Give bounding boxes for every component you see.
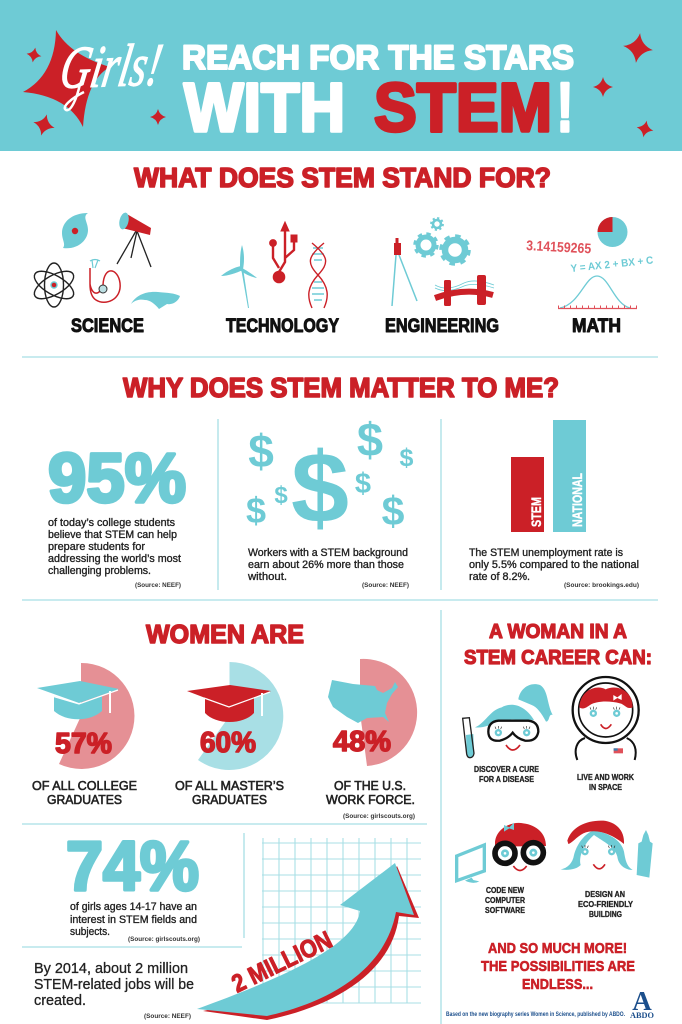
icon: stethoscope — [90, 260, 120, 302]
icon: coder — [457, 823, 546, 883]
icon: teal cap — [37, 681, 119, 719]
header banner — [0, 0, 682, 151]
grid — [262, 838, 421, 1003]
icon: pie — [598, 217, 628, 247]
pie — [59, 663, 134, 769]
text: The STEM unemployment rate is — [469, 547, 623, 559]
caption: GRADUATES — [47, 792, 122, 807]
icon: dollar signs: $ — [355, 468, 371, 500]
text: of today’s college students — [48, 517, 175, 529]
pie — [360, 659, 417, 766]
closing message: ENDLESS... — [522, 976, 593, 993]
icon: gears — [415, 218, 469, 264]
heading: women are: WOMEN ARE — [146, 619, 304, 649]
title exclamation: ! — [557, 69, 573, 146]
stat: 95% — [48, 439, 186, 517]
icon: compass — [392, 238, 417, 306]
title STEM: STEM — [374, 69, 552, 146]
heading: a woman in a stem career can: STEM CAREER CAN: — [464, 647, 652, 669]
stat: 60% — [200, 727, 256, 759]
panel: coder girl — [457, 823, 546, 915]
caption: CODE NEW — [486, 886, 524, 895]
icon: big red star — [23, 30, 110, 127]
caption: WORK FORCE. — [326, 792, 415, 807]
stat: 57% — [55, 728, 112, 760]
icon: dollar signs: $ — [357, 413, 383, 466]
panel: scientist girl — [463, 684, 553, 784]
text: challenging problems. — [48, 565, 151, 577]
footer note: Based on the new biography series Women in Science, published by ABDO. — [446, 1011, 625, 1018]
pi digits: 3.14159265 — [526, 237, 592, 256]
caption: DISCOVER A CURE — [474, 765, 540, 774]
caption: BUILDING — [589, 910, 622, 919]
caption: OF ALL MASTER’S — [175, 778, 284, 793]
panel: 74 percent — [66, 827, 200, 943]
Girls script: Girls! — [56, 32, 167, 102]
icon: dollar signs: $ — [248, 425, 274, 477]
stat: 74% — [66, 827, 199, 905]
closing message: THE POSSIBILITIES ARE — [481, 958, 635, 975]
heading: what does stem stand for: WHAT DOES STEM STAND FOR? — [134, 162, 551, 193]
icon: dna — [309, 243, 327, 308]
icon: hurricane — [62, 213, 88, 248]
text: without. — [247, 571, 287, 583]
text: earn about 26% more than those — [248, 559, 404, 571]
chart: growth arrow — [197, 838, 421, 1020]
closing message: AND SO MUCH MORE! — [488, 940, 627, 957]
text: believe that STEM can help — [48, 529, 177, 541]
icon: dollar signs: $ — [382, 488, 405, 534]
panel: science — [30, 212, 180, 337]
text: Workers with a STEM background — [248, 547, 408, 559]
panel: unemployment — [469, 420, 639, 589]
heading: a woman in a stem career can: A WOMAN IN A — [489, 621, 627, 643]
text: STEM-related jobs will be — [34, 976, 194, 993]
text: created. — [34, 992, 86, 1009]
icon: small stars — [25, 31, 655, 139]
caption: IN SPACE — [589, 783, 623, 792]
text: interest in STEM fields and — [70, 914, 197, 926]
source: (Source: NEEF) — [362, 582, 409, 589]
panel: 2 million jobs text — [34, 960, 194, 1020]
panel: 95 percent — [48, 439, 186, 589]
icon: bridge — [435, 275, 494, 306]
pie — [198, 662, 283, 770]
icon: red cap — [187, 685, 271, 722]
text: addressing the world’s most — [48, 553, 181, 565]
source: (Source: girlscouts.org) — [128, 936, 200, 943]
icon: architect — [561, 821, 653, 878]
stat: 48% — [333, 726, 391, 758]
label: MATH — [572, 316, 621, 337]
panel: math — [526, 217, 654, 337]
logo: ABDO: A — [632, 986, 652, 1016]
text: By 2014, about 2 million — [34, 960, 188, 977]
icon: scientist — [463, 684, 553, 758]
icon: astronaut — [573, 677, 639, 760]
heading: why does stem matter: WHY DOES STEM MATTER TO ME? — [123, 372, 559, 403]
caption: SOFTWARE — [485, 906, 526, 915]
text: rate of 8.2%. — [469, 571, 530, 583]
caption: OF THE U.S. — [334, 778, 406, 793]
bar chart — [511, 420, 586, 532]
icon: atom — [30, 263, 78, 307]
icon: wind turbine — [221, 245, 257, 308]
label: TECHNOLOGY — [226, 316, 339, 337]
icon: dollar signs — [246, 413, 414, 544]
icon: bell curve — [558, 276, 637, 308]
caption: FOR A DISEASE — [479, 775, 535, 784]
source: (Source: NEEF) — [144, 1013, 191, 1020]
source: (Source: NEEF) — [135, 582, 181, 589]
source: (Source: girlscouts.org) — [343, 813, 415, 820]
caption: GRADUATES — [192, 792, 267, 807]
Girls script — [56, 32, 167, 110]
caption: ECO-FRIENDLY — [578, 900, 634, 909]
caption: LIVE AND WORK — [577, 773, 634, 782]
icon: telescope — [117, 212, 151, 267]
icon: dollar signs: $ — [274, 482, 288, 509]
arrow shadow — [203, 866, 419, 1020]
caption: COMPUTER — [485, 896, 525, 905]
source: (Source: brookings.edu) — [564, 582, 639, 589]
panel: 48 percent — [326, 659, 417, 820]
icon: whale — [131, 292, 180, 309]
icon: usb — [270, 222, 297, 283]
arrow — [197, 863, 414, 1016]
label: SCIENCE — [71, 316, 144, 337]
panel: 57 percent — [32, 663, 137, 807]
title line 1: REACH FOR THE STARS — [182, 39, 574, 77]
panel: earnings — [246, 413, 414, 589]
icon: dollar signs: $ — [246, 490, 266, 531]
equation: Y = AX 2 + BX + C — [570, 254, 654, 275]
title line 2: WITH — [184, 69, 345, 146]
caption: DESIGN AN — [585, 890, 625, 899]
panel: architect girl — [561, 821, 653, 919]
panel: astronaut girl — [573, 677, 639, 792]
panel: 60 percent — [175, 662, 284, 807]
text: of girls ages 14-17 have an — [70, 901, 197, 913]
text: subjects. — [70, 926, 110, 938]
arrow label: 2 MILLION — [227, 926, 337, 998]
heading: a woman in a stem career can — [464, 621, 652, 669]
logo: ABDO: ABDO — [630, 1011, 654, 1020]
text: prepare students for — [48, 541, 145, 553]
label: ENGINEERING — [385, 316, 499, 337]
icon: usa map — [328, 680, 398, 723]
icon: dollar signs: $ — [291, 432, 349, 544]
icon: dollar signs: $ — [400, 444, 414, 472]
bar chart: STEM — [528, 497, 544, 527]
caption: OF ALL COLLEGE — [32, 778, 137, 793]
text: only 5.5% compared to the national — [469, 559, 639, 571]
bar chart: NATIONAL — [569, 473, 585, 527]
panel: engineering — [385, 218, 499, 337]
panel: technology — [221, 222, 339, 337]
